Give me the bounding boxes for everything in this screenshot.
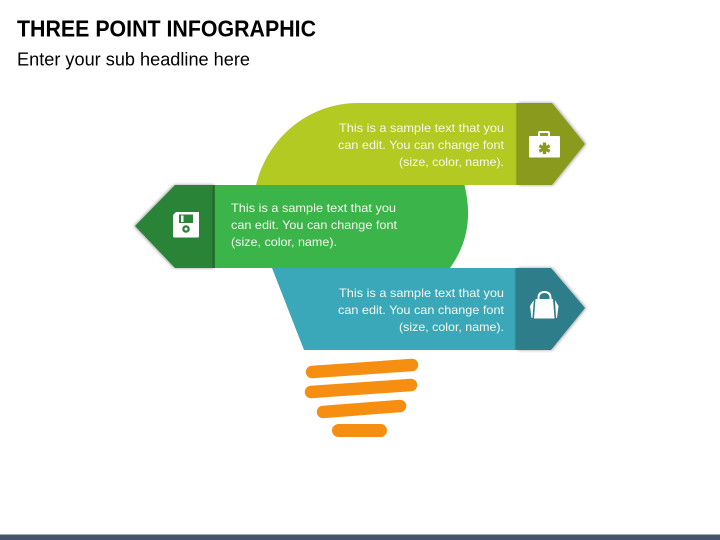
teal body (272, 268, 517, 350)
green panel text: can edit. You can change font (231, 218, 398, 232)
teal panel text: can edit. You can change font (338, 303, 505, 317)
green panel text (231, 201, 398, 249)
teal arrow head (517, 268, 585, 350)
lime panel text: (size, color, name). (399, 155, 504, 169)
icon: bulb base stripes (311, 365, 412, 430)
lime panel text: This is a sample text that you (339, 121, 504, 135)
green panel text: This is a sample text that you (231, 201, 396, 215)
icon: medical briefcase (529, 131, 560, 158)
lime panel text (338, 121, 505, 169)
teal band shadow (514, 268, 517, 350)
subtitle: Enter your sub headline here (17, 50, 250, 70)
icon: floppy disk (173, 212, 199, 238)
green panel text: (size, color, name). (231, 235, 337, 249)
lime body (256, 103, 518, 185)
title: THREE POINT INFOGRAPHIC (17, 16, 316, 42)
teal panel text (338, 286, 505, 334)
panel: bottom teal arrow (272, 268, 585, 350)
footer bar (0, 534, 720, 540)
lime panel text: can edit. You can change font (338, 138, 505, 152)
lime arrow head (518, 103, 585, 185)
panel: middle green arrow (135, 185, 468, 268)
teal panel text: (size, color, name). (399, 320, 504, 334)
green body (215, 185, 468, 268)
icon: handbag (530, 292, 558, 318)
panel: top lime arrow (256, 103, 585, 185)
green arrow head (135, 185, 215, 268)
lime band shadow (515, 103, 518, 185)
teal panel text: This is a sample text that you (339, 286, 504, 300)
green band shadow (212, 185, 216, 268)
